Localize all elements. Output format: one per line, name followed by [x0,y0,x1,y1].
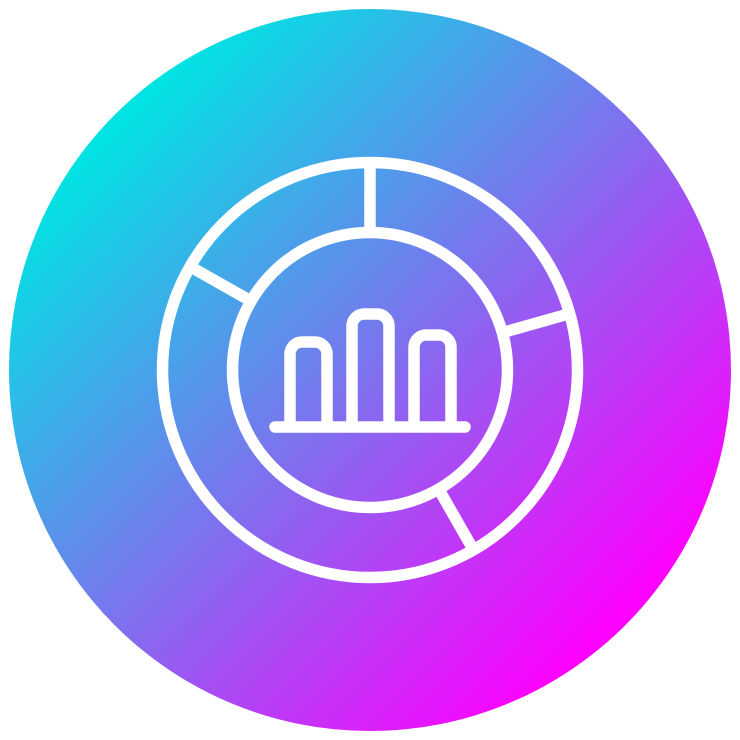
right bar [414,335,451,427]
left bar [290,342,327,427]
middle bar [352,314,389,427]
baseline [275,421,465,433]
outer ring [162,162,578,578]
inner ring [232,232,508,508]
segment dividers [190,163,570,550]
icon: donut chart [162,162,578,578]
icon: bar chart [275,314,465,427]
